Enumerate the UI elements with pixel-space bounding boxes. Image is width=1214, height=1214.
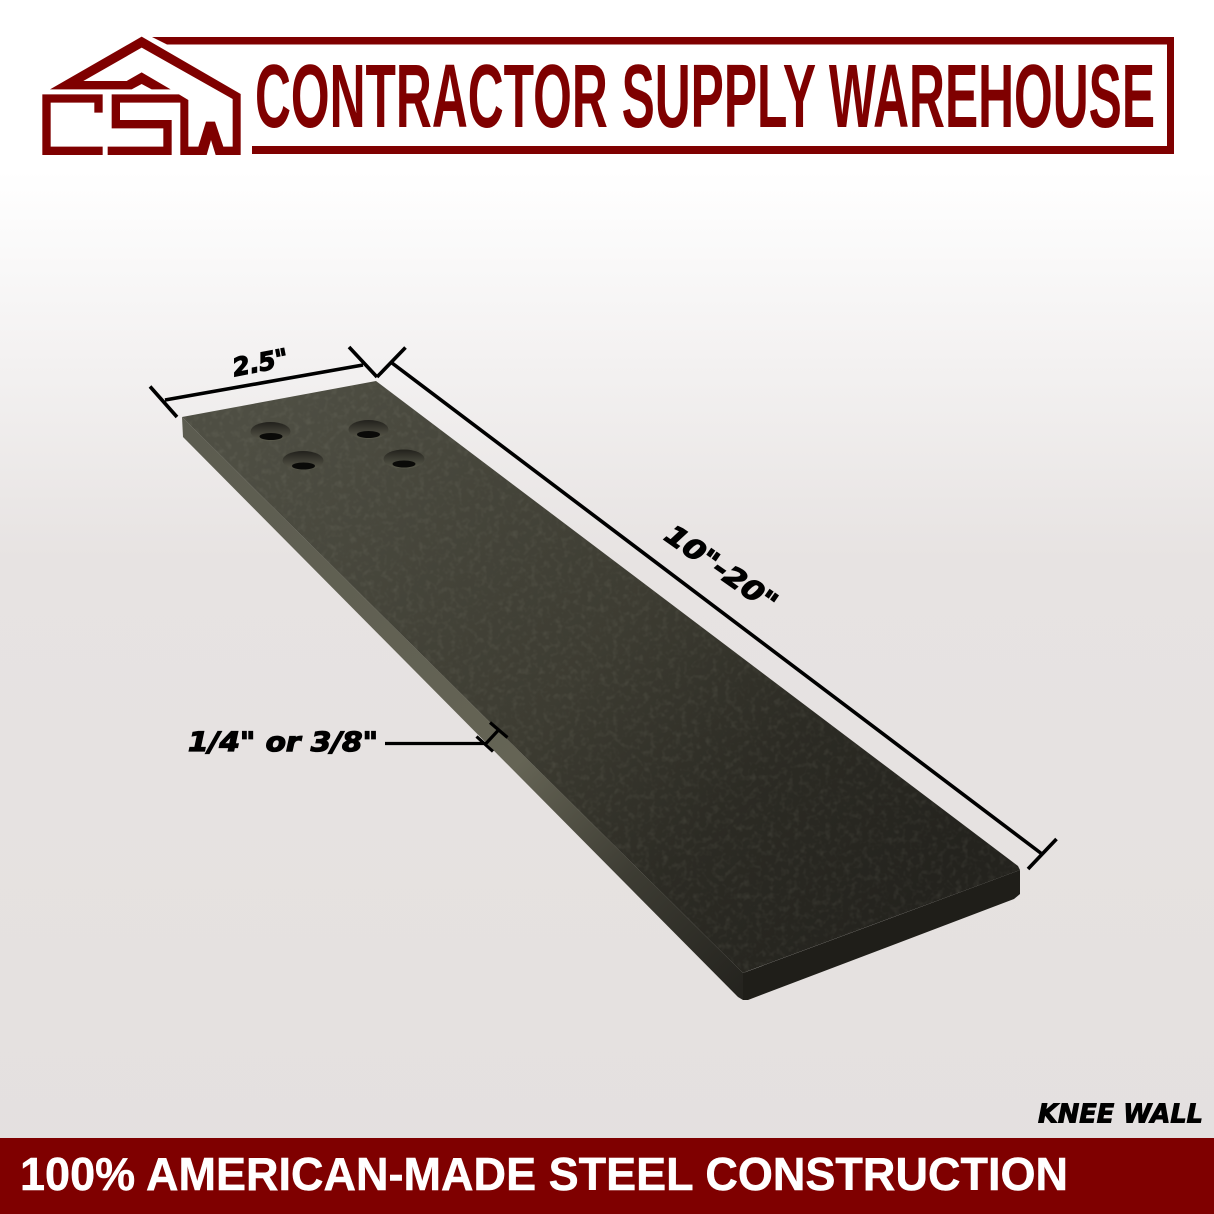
length dimension lines [377, 348, 1056, 869]
icon: CSW house logo [42, 37, 241, 155]
product name label: KNEE WALL [1038, 1100, 1203, 1130]
hole 1 [250, 422, 290, 441]
footer bar [0, 1138, 1214, 1214]
mounting holes [250, 420, 424, 470]
header logo and wordmark [42, 37, 1174, 155]
plate side face [182, 417, 743, 1000]
dimension: width 2.5 inch [150, 343, 377, 417]
hole 3 [282, 451, 324, 470]
width label: 2.5" [230, 343, 291, 382]
hole 2 [348, 420, 388, 439]
dimension: length 10 to 20 inch [377, 348, 1056, 869]
width dimension lines [150, 347, 377, 417]
plate top face [182, 381, 1020, 973]
steel plate [182, 381, 1020, 1000]
hole 4 [384, 450, 424, 468]
footer banner [0, 1138, 1214, 1214]
dimension: thickness [188, 722, 508, 758]
thickness label: 1/4" or 3/8" [188, 727, 378, 758]
plate surface texture [182, 381, 1020, 973]
header frame [152, 37, 1174, 154]
footer text: 100% AMERICAN-MADE STEEL CONSTRUCTION [20, 1148, 1068, 1200]
thickness dimension lines [385, 722, 508, 752]
length label: 10"-20" [659, 519, 783, 619]
plate front face [743, 870, 1020, 1000]
